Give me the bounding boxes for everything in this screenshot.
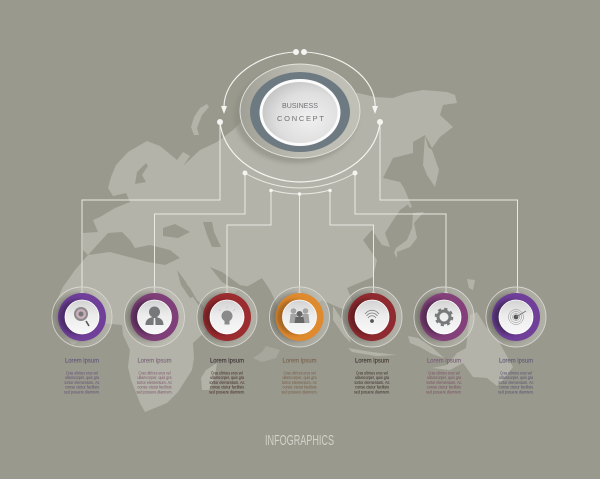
node 1 text xyxy=(64,370,100,394)
node 3 text: Cras ultrices eros vel xyxy=(211,370,243,376)
central business concept disc xyxy=(234,64,360,163)
node 1 title: Lorem ipsum xyxy=(65,358,99,364)
node 6 text: tortor elementum. Ac xyxy=(426,380,462,385)
node 4 text: Cras ultrices eros vel xyxy=(284,370,316,376)
node 2: person xyxy=(124,287,184,347)
seas cut into land xyxy=(88,163,255,298)
footer title: INFOGRAPHICS xyxy=(265,433,334,449)
node 3 text xyxy=(209,370,245,394)
node 2 text: tortor elementum. Ac xyxy=(137,380,173,385)
Philippines island xyxy=(467,279,475,290)
node 5 text: sed posuere diamrem. xyxy=(354,389,390,394)
node 3 text: ullamcorper, quis gra xyxy=(210,375,245,380)
node 1 text: conse ctetur facilisis xyxy=(65,385,99,390)
node 2 text: Cras ultrices eros vel xyxy=(138,370,171,376)
node 6 text: sed posuere diamrem. xyxy=(426,389,462,394)
node 1 text: tortor elementum. Ac xyxy=(64,380,100,385)
node 1 text: Cras ultrices eros vel xyxy=(66,370,98,376)
heading: concept: CONCEPT xyxy=(277,114,324,123)
icon: businessman xyxy=(146,306,164,325)
icon: bulb xyxy=(219,306,235,324)
node 2 text: conse ctetur facilisis xyxy=(138,385,172,390)
connector lines xyxy=(82,122,518,293)
node 4: people xyxy=(270,287,330,347)
node 4 text xyxy=(282,370,318,394)
top arrows xyxy=(221,49,378,114)
node 1: search xyxy=(52,287,112,347)
node 7 text: sed posuere diamrem. xyxy=(498,389,534,394)
node 4 text: sed posuere diamrem. xyxy=(282,389,318,394)
node 3 title: Lorem ipsum xyxy=(210,358,244,364)
node 5 text xyxy=(354,370,390,394)
icon: group of people xyxy=(290,308,310,323)
icon: target with arrow xyxy=(508,310,526,324)
node 7 text: tortor elementum. Ac xyxy=(498,380,534,385)
icon: wifi xyxy=(365,310,379,323)
Australia xyxy=(432,312,513,386)
node 2 text xyxy=(136,370,173,394)
node 6 text: Cras ultrices eros vel xyxy=(428,370,460,376)
node 7: target xyxy=(486,287,546,347)
Sumatra Java islands xyxy=(333,306,397,356)
node 3 text: sed posuere diamrem. xyxy=(209,389,245,394)
node 5 text: ullamcorper, quis gra xyxy=(355,375,390,380)
node 3 text: tortor elementum. Ac xyxy=(210,380,245,385)
world map xyxy=(53,90,513,412)
node 6: gear xyxy=(414,287,474,347)
node 2 title: Lorem ipsum xyxy=(138,358,172,364)
Indian Ocean islets xyxy=(253,346,280,362)
node 6 text: conse ctetur facilisis xyxy=(427,385,461,390)
Sakhalin xyxy=(400,182,412,208)
connector dots xyxy=(80,119,520,296)
node 4 text: ullamcorper, quis gra xyxy=(282,375,317,380)
node 4 title: Lorem ipsum xyxy=(282,358,316,364)
node 6 title: Lorem ipsum xyxy=(427,358,461,364)
heading: business: BUSINESS xyxy=(282,101,318,110)
icon: magnifier xyxy=(74,307,89,326)
icon: gear xyxy=(436,309,452,325)
Madagascar xyxy=(201,363,217,390)
node 3 text: conse ctetur facilisis xyxy=(210,385,244,390)
node 7 text: Cras ultrices eros vel xyxy=(500,370,532,376)
node 5 text: tortor elementum. Ac xyxy=(354,380,390,385)
node 2 text: sed posuere diamrem. xyxy=(136,389,172,394)
node 1 text: ullamcorper, quis gra xyxy=(65,375,100,380)
node 3: light bulb xyxy=(197,287,257,347)
Novaya Zemlya island xyxy=(191,104,209,135)
node 7 text xyxy=(498,370,534,394)
node 7 text: ullamcorper, quis gra xyxy=(499,375,534,380)
node 7 title: Lorem ipsum xyxy=(499,358,533,364)
node 6 text: ullamcorper, quis gra xyxy=(427,375,462,380)
node 4 text: tortor elementum. Ac xyxy=(282,380,318,385)
node 4 text: conse ctetur facilisis xyxy=(282,385,316,390)
node 7 text: conse ctetur facilisis xyxy=(499,385,533,390)
node 5 text: Cras ultrices eros vel xyxy=(356,370,388,376)
node 2 text: ullamcorper, quis gra xyxy=(138,375,172,380)
Japan xyxy=(394,212,424,258)
node 5: wifi xyxy=(342,287,402,347)
node 6 text xyxy=(426,370,462,394)
Kamchatka xyxy=(423,135,439,187)
node 5 title: Lorem ipsum xyxy=(355,358,389,364)
node 5 text: conse ctetur facilisis xyxy=(355,385,389,390)
New Guinea xyxy=(408,336,444,358)
node 1 text: sed posuere diamrem. xyxy=(64,389,100,394)
